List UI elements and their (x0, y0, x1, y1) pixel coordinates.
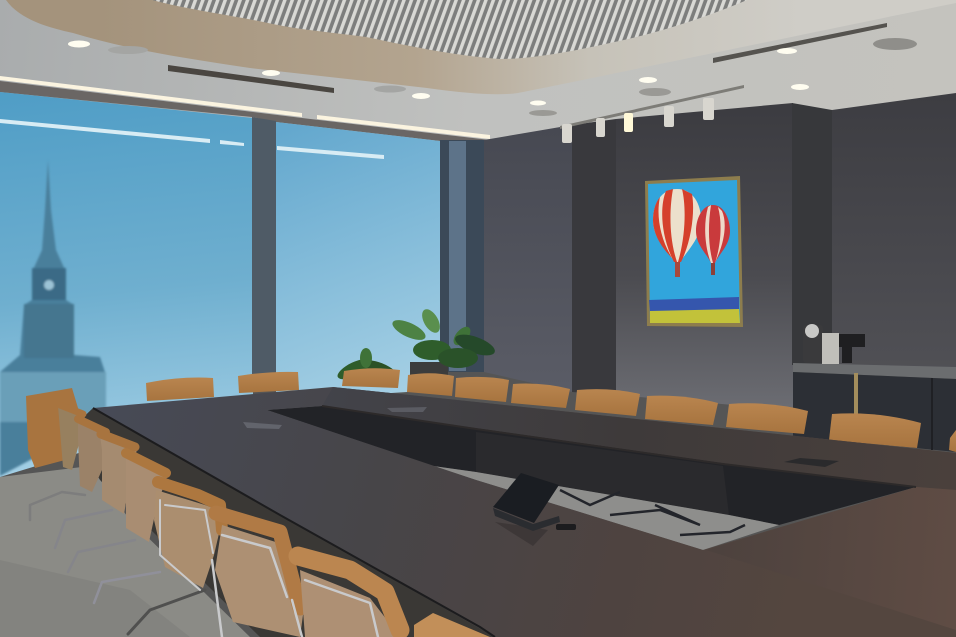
chair 4 (94, 434, 160, 603)
chair 6 (154, 482, 224, 590)
table back arm (322, 387, 956, 490)
reflected light strips (0, 119, 210, 143)
chair bases through opening (560, 490, 745, 535)
floor through opening (433, 466, 779, 550)
wall dark pillar (792, 103, 832, 365)
window mullion (252, 117, 276, 376)
wall panel left (484, 125, 572, 392)
chair 8 (292, 556, 400, 637)
left row chairs (26, 388, 490, 637)
table opening apron (267, 406, 916, 525)
painting frame (645, 176, 743, 327)
ceiling perforated light panel (152, 0, 747, 59)
table right segment (706, 487, 956, 630)
ceiling track (713, 23, 887, 63)
track spotlights (560, 85, 744, 143)
wall panel right (832, 93, 956, 370)
palace tower silhouette (0, 160, 106, 476)
wall dark column (572, 119, 616, 395)
plants (335, 306, 497, 384)
laptop (493, 473, 576, 546)
painting: hot air balloons (645, 176, 743, 327)
ceiling (0, 0, 956, 145)
chair 9 (414, 613, 490, 637)
chair 7 (212, 513, 305, 637)
coffee machine (803, 324, 865, 364)
left window pane (0, 92, 253, 477)
window glazing (0, 92, 484, 477)
chair 2 (55, 405, 112, 548)
LED strips (0, 76, 302, 117)
walls (484, 93, 956, 410)
table edge (322, 406, 916, 487)
balloon small (696, 205, 730, 275)
right window pane (276, 122, 440, 400)
window head band (0, 81, 490, 141)
ceiling vent (168, 65, 334, 93)
chair 5 (126, 453, 205, 634)
chair 1 (26, 388, 85, 520)
note pads (243, 422, 282, 429)
back row chairs (146, 368, 956, 452)
wall panel centre (616, 103, 793, 410)
conference table (93, 387, 956, 637)
carpet floor (0, 408, 495, 637)
window right frame (440, 140, 484, 372)
ceiling spotlights (68, 38, 917, 116)
balloon large (653, 189, 701, 277)
painting canvas (648, 180, 740, 323)
credenza cabinet (793, 363, 956, 452)
chair 3 (68, 419, 135, 572)
table left and front arm (93, 387, 956, 637)
ceiling cove band (6, 0, 956, 94)
